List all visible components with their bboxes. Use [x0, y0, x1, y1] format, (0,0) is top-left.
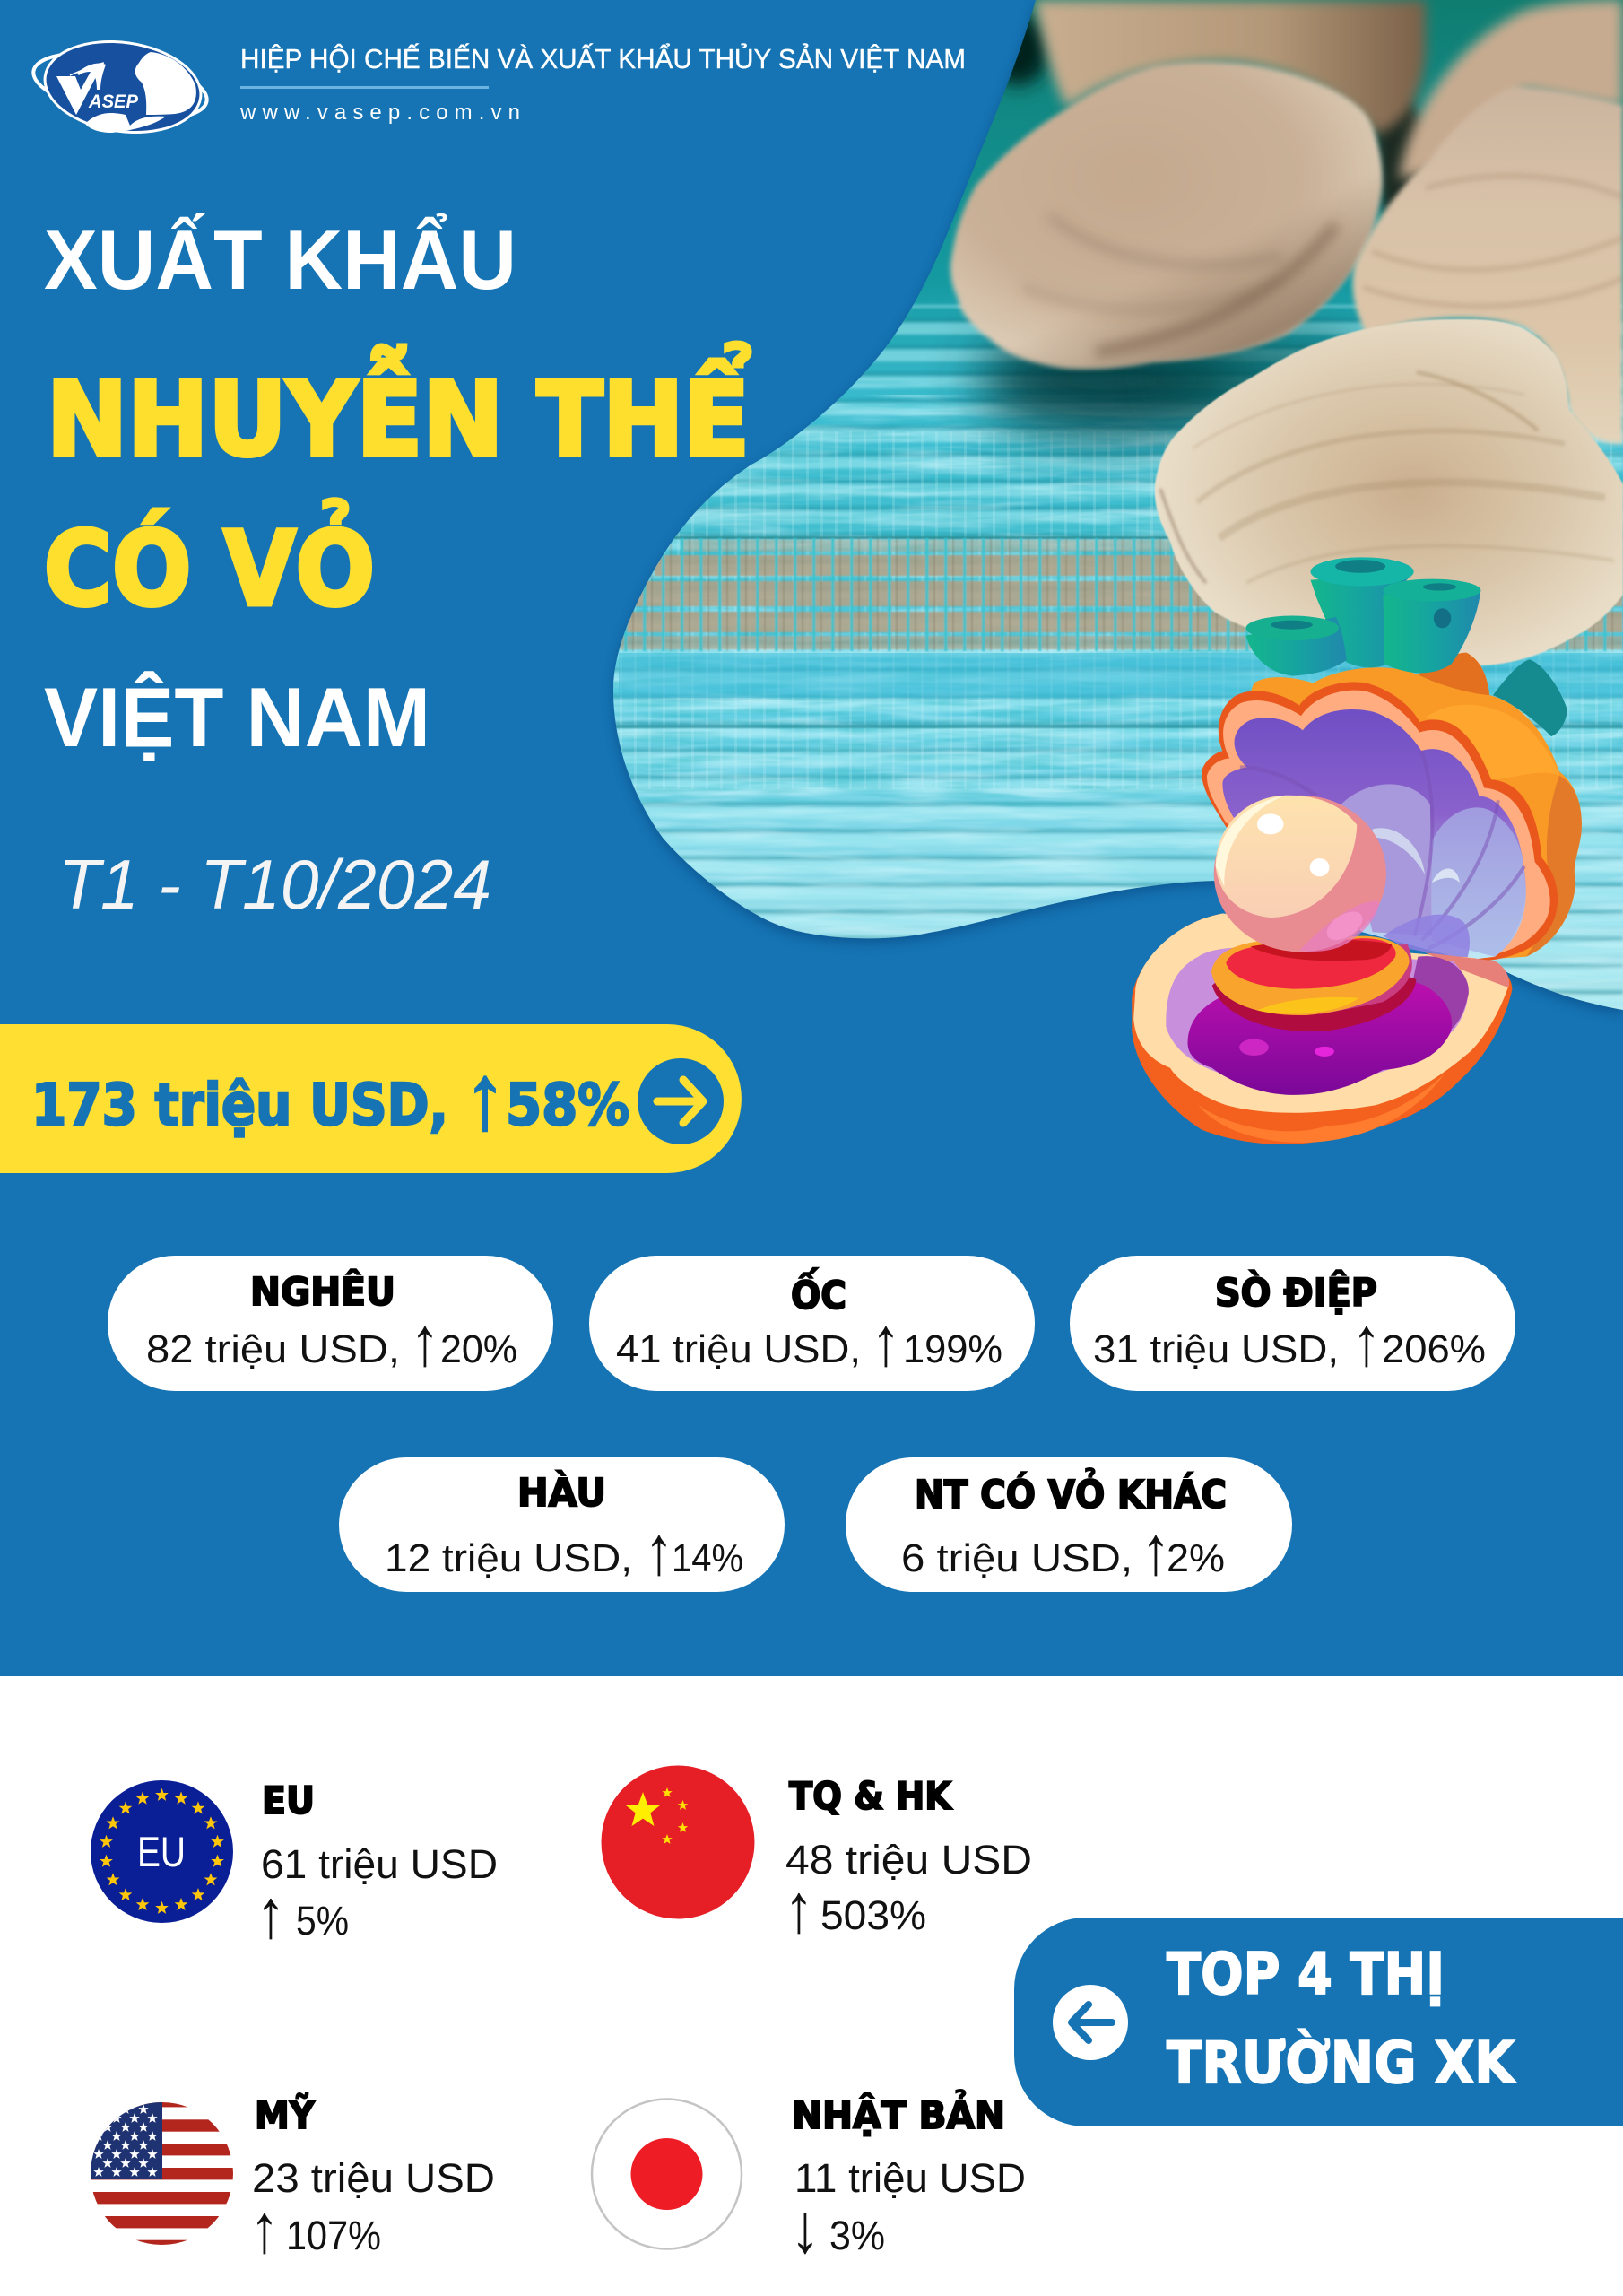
pill: hàu: 12 triệu USD, — [385, 1536, 632, 1580]
pill: nt có vỏ khác: ↑ — [1141, 1512, 1171, 1589]
icon: arrow right — [638, 1058, 724, 1144]
logo wordmark: ASEP — [88, 91, 139, 112]
icon: arrow left — [1053, 1985, 1128, 2060]
pill: hàu: HÀU — [517, 1470, 606, 1516]
red band under gold ring — [1212, 966, 1416, 1031]
pill: hàu: 14% — [672, 1536, 743, 1580]
market: Mỹ: 23 triệu USD — [252, 2155, 495, 2201]
pill: nghêu: NGHÊU — [250, 1269, 395, 1315]
market: Nhật Bản — [592, 2089, 1026, 2267]
pill: ốc — [589, 1256, 1035, 1391]
pill: ốc: ↑ — [871, 1303, 901, 1380]
total value pill — [0, 1024, 742, 1173]
market: TQ & HK: 503% — [820, 1892, 926, 1938]
market: Nhật Bản: NHẬT BẢN — [792, 2089, 1005, 2137]
white lower panel — [0, 1676, 1623, 2296]
organisation name — [239, 42, 966, 125]
pill: nghêu — [108, 1256, 553, 1391]
total value pill: 173 triệu USD, — [31, 1073, 448, 1139]
market: Mỹ: 107% — [286, 2213, 381, 2258]
pill: sò điệp: 206% — [1382, 1327, 1486, 1371]
market: EU — [91, 1779, 498, 1952]
peach lip — [1207, 691, 1550, 959]
pill: nghêu: 82 triệu USD, — [146, 1327, 400, 1371]
lower shell inner — [1166, 947, 1468, 1085]
blue background panel — [0, 0, 1623, 1676]
market: TQ & HK: 48 triệu USD — [785, 1837, 1032, 1883]
market: Nhật Bản: 3% — [829, 2213, 885, 2258]
organisation name: www.vasep.com.vn — [239, 100, 520, 125]
pill: ốc: ỐC — [791, 1267, 846, 1318]
title: NHUYỄN THỂ — [47, 343, 751, 479]
total value pill: ↑ — [464, 1046, 506, 1148]
pill: nt có vỏ khác: 2% — [1167, 1536, 1225, 1580]
back shell orange — [1216, 653, 1582, 961]
lower shell outer — [1132, 914, 1512, 1144]
title: CÓ VỎ — [44, 500, 375, 629]
gold ring — [1211, 936, 1410, 1015]
market: EU: ↑ — [256, 1875, 286, 1952]
purple interior — [1222, 709, 1526, 960]
callout: top 4 markets — [1014, 1918, 1623, 2126]
pill: hàu: ↑ — [644, 1512, 674, 1589]
icon: China flag — [601, 1765, 755, 1919]
shell rim — [1202, 682, 1558, 961]
market: EU: 61 triệu USD — [261, 1841, 498, 1887]
period: T1 - T10/2024 — [58, 845, 491, 924]
VASEP logo — [29, 30, 212, 144]
title: XUẤT KHẨU — [44, 212, 516, 307]
small coral right — [1493, 659, 1567, 736]
market: Nhật Bản: 11 triệu USD — [794, 2155, 1026, 2201]
total value pill: 58% — [506, 1073, 629, 1139]
pill: sò điệp — [1070, 1256, 1515, 1391]
icon: Japan flag — [592, 2099, 742, 2249]
pill: nt có vỏ khác: NT CÓ VỎ KHÁC — [915, 1468, 1227, 1518]
market: TQ & HK: ↑ — [784, 1870, 814, 1947]
pill: sò điệp: SÒ ĐIỆP — [1215, 1270, 1377, 1316]
market: TQ & HK: TQ & HK — [789, 1774, 952, 1818]
pill: nt có vỏ khác: 6 triệu USD, — [901, 1536, 1133, 1580]
callout: top 4 markets: TRƯỜNG XK — [1167, 2029, 1516, 2097]
lower shell cream lip — [1133, 914, 1508, 1113]
market: Mỹ: ↑ — [249, 2190, 280, 2267]
market: EU: 5% — [296, 1898, 349, 1944]
pill: ốc: 41 triệu USD, — [616, 1327, 861, 1371]
icon: EU flag — [91, 1780, 233, 1923]
pill: ốc: 199% — [903, 1327, 1002, 1371]
photo blob shadow — [613, 4, 1623, 1014]
pill: nghêu: 20% — [440, 1327, 517, 1371]
organisation name: HIỆP HỘI CHẾ BIẾN VÀ XUẤT KHẨU THỦY SẢN VIỆT NAM — [240, 42, 966, 74]
callout: top 4 markets: TOP 4 THỊ — [1167, 1942, 1445, 2008]
pill: hàu — [339, 1457, 785, 1592]
pearl — [1214, 796, 1386, 952]
red top cushion — [1226, 938, 1396, 989]
market: Mỹ: MỸ — [255, 2092, 316, 2137]
market: EU: EU — [262, 1779, 315, 1822]
pill: sò điệp: 31 triệu USD, — [1093, 1327, 1339, 1371]
title: VIỆT NAM — [44, 670, 430, 764]
market: TQ & HK — [601, 1765, 1032, 1947]
pill: sò điệp: ↑ — [1351, 1303, 1382, 1380]
market: Nhật Bản: ↓ — [790, 2190, 820, 2267]
photo: clams on teal woven fabric — [574, 0, 1623, 1022]
market: Mỹ — [91, 2092, 495, 2267]
magenta cushion — [1188, 974, 1452, 1095]
icon: US flag — [91, 2095, 233, 2252]
title — [44, 212, 751, 764]
pill: nt có vỏ khác — [846, 1457, 1292, 1592]
pill: nghêu: ↑ — [410, 1303, 440, 1380]
icon: EU flag: EU — [137, 1828, 186, 1875]
illustration: open shell with pearl — [1132, 557, 1582, 1144]
coral tubes — [1310, 574, 1412, 667]
